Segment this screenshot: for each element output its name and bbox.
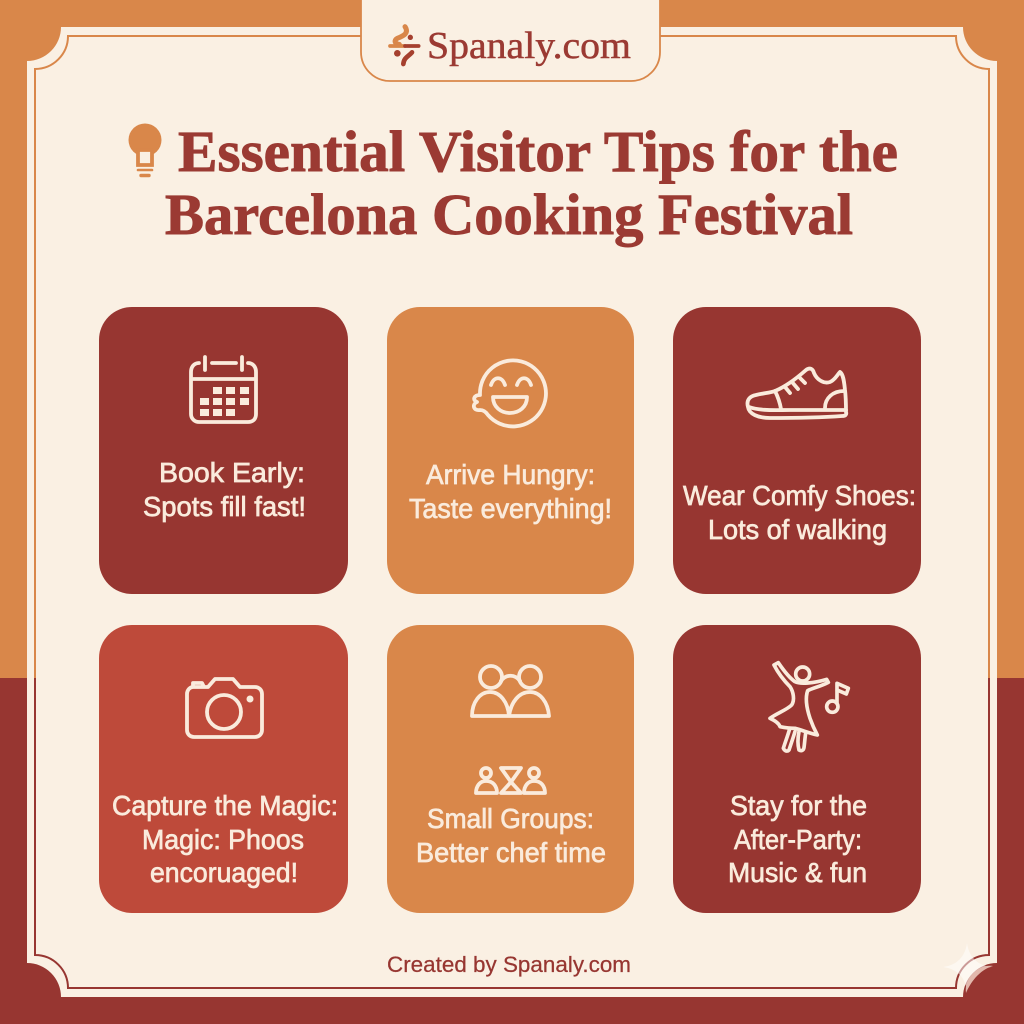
tip text: Taste everything!: [409, 493, 612, 524]
icon: calendar: [191, 357, 256, 422]
background: dark red bottom band: [0, 678, 1024, 1024]
tip text: Book Early:: [159, 457, 305, 488]
footer credit: Created by Spanaly.com: [387, 952, 631, 977]
panel: after-party: [673, 625, 921, 913]
tab shape: [361, 0, 660, 81]
tip text: [416, 803, 606, 868]
panel: comfy shoes: [673, 307, 921, 594]
tip text: Better chef time: [416, 837, 606, 868]
icon: camera: [187, 679, 262, 737]
card background: [673, 625, 921, 913]
title: Essential Visitor Tips for the: [178, 119, 898, 184]
tip text: Lots of walking: [708, 514, 887, 545]
logo tab: [361, 0, 660, 81]
tip text: Music & fun: [728, 857, 867, 888]
tip text: [143, 457, 306, 522]
panel: small groups: [387, 625, 634, 913]
panel: book early: [99, 307, 348, 594]
tip text: [728, 790, 867, 888]
title: Barcelona Cooking Festival: [165, 182, 853, 247]
icon: dancer and music note: [770, 663, 848, 751]
tip text: Magic: Phoos: [142, 824, 304, 855]
icon: light bulb: [128, 124, 162, 176]
icon: laughing face: [474, 360, 546, 426]
tip text: [409, 459, 612, 524]
tip text: [112, 790, 338, 888]
tip text: encoruaged!: [150, 857, 298, 888]
tip text: [683, 480, 916, 545]
tip text: Arrive Hungry:: [426, 459, 595, 490]
icon: two people: [472, 666, 549, 716]
tip text: Spots fill fast!: [143, 491, 306, 522]
title: [165, 119, 898, 247]
tip text: Small Groups:: [427, 803, 594, 834]
background: orange top band: [0, 0, 1024, 678]
card background: [387, 307, 634, 594]
icon: sneaker: [747, 369, 846, 418]
panel: arrive hungry: [387, 307, 634, 594]
watermark sparkle: [943, 943, 993, 993]
card background: [99, 625, 348, 913]
card background: [387, 625, 634, 913]
tip text: Stay for the: [730, 790, 867, 821]
tip text: Wear Comfy Shoes:: [683, 480, 916, 511]
tip text: After-Party:: [734, 824, 862, 855]
logo text: Spanaly.com: [427, 25, 631, 67]
tip text: Capture the Magic:: [112, 790, 338, 821]
panel: capture the magic: [99, 625, 348, 913]
card background: [673, 307, 921, 594]
card background: [99, 307, 348, 594]
icon: logo steam and pot: [390, 27, 419, 64]
icon: small people and hourglass: [476, 768, 545, 793]
